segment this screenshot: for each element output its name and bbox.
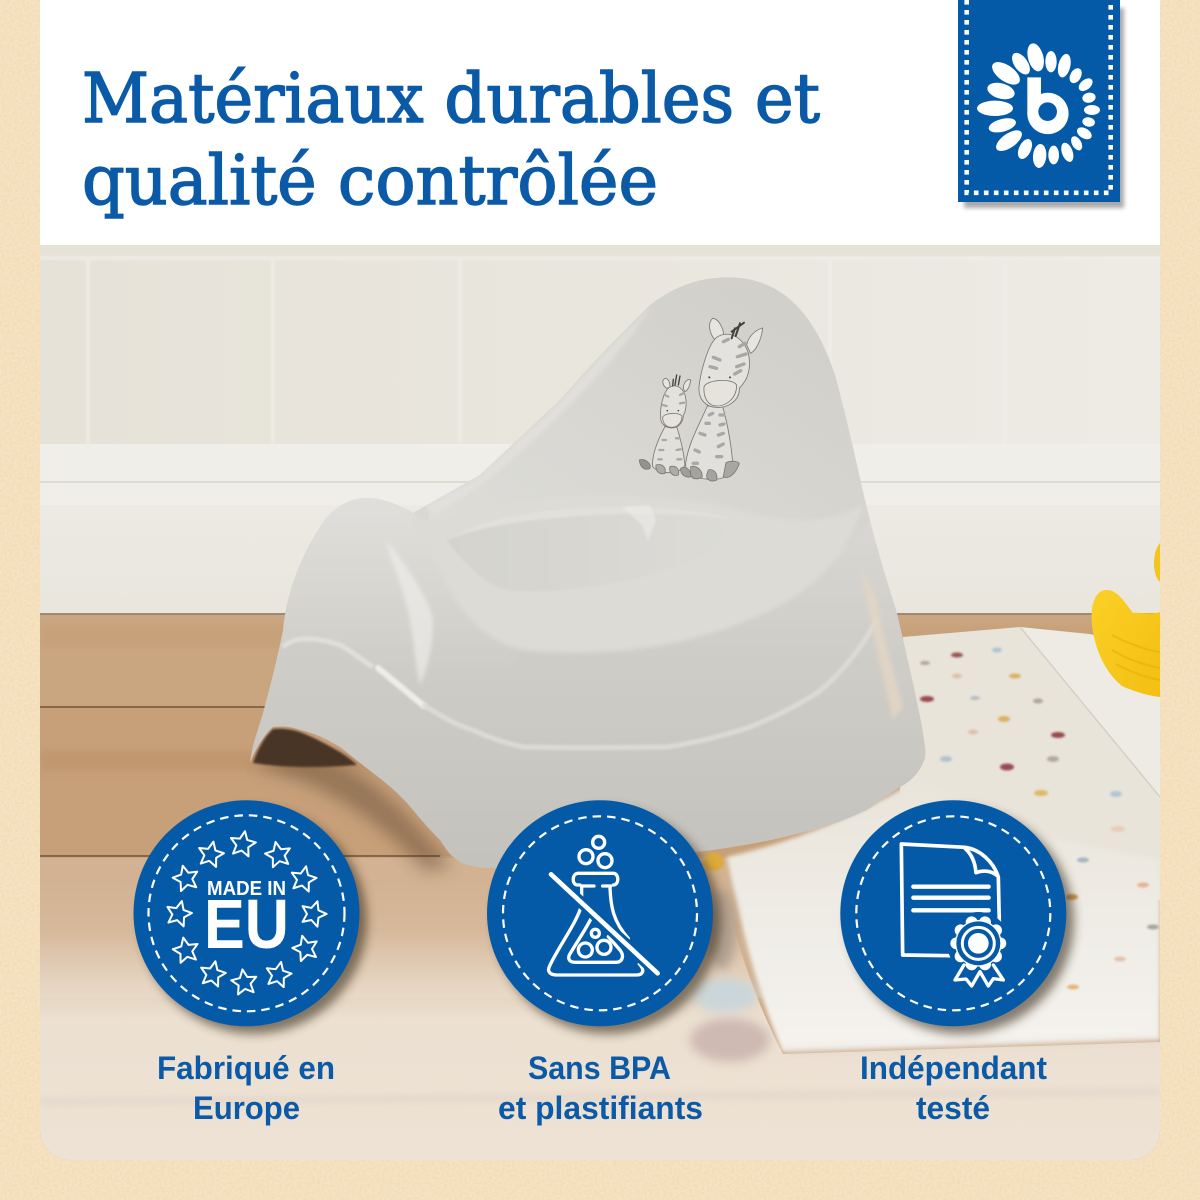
- warm reflection: [864, 580, 902, 718]
- caption: Fabriqué en Europe: Europe: [193, 1090, 300, 1126]
- bottom fade overlay: [40, 926, 1160, 1160]
- wooden floor: [40, 615, 1160, 1160]
- caption: Fabriqué en Europe: [157, 1050, 335, 1126]
- blurred toy: [690, 853, 770, 1062]
- bump: [283, 498, 523, 730]
- brand logo tag: [958, 0, 1124, 208]
- badge: independently tested: [840, 800, 1074, 1034]
- caption: Indépendant testé: testé: [916, 1090, 990, 1126]
- gloss streak on bump: [390, 548, 434, 682]
- icon: crossed-out flask: [549, 836, 658, 975]
- dashed ring: [503, 816, 697, 1010]
- potty shadow: [255, 757, 452, 872]
- seat opening back wall: [447, 507, 735, 540]
- rubber duck: [1092, 543, 1160, 697]
- badge shadow: [848, 808, 1074, 1034]
- title: Matériaux durables et: [82, 60, 820, 139]
- floor line near bottom: [40, 1092, 1160, 1102]
- badge disc: [487, 800, 713, 1026]
- potty silhouette: [250, 505, 926, 868]
- big zebra: [686, 318, 763, 481]
- towel far dots: [1066, 858, 1159, 990]
- ridge line: [423, 620, 877, 748]
- dashed ring: [856, 816, 1050, 1010]
- backrest highlight: [524, 321, 638, 442]
- patterned rug: [900, 627, 1160, 900]
- caption: Indépendant testé: Indépendant: [860, 1050, 1047, 1086]
- white towel: [727, 775, 1160, 1052]
- badge shadow: [494, 808, 720, 1034]
- caption: Indépendant testé: [860, 1050, 1047, 1126]
- zebra decal: [639, 318, 763, 481]
- lip gloss: [378, 668, 424, 706]
- dashed ring: [148, 815, 344, 1011]
- badge shadow: [141, 808, 367, 1034]
- caption: Sans BPA et plastifiants: [498, 1050, 703, 1126]
- wall tiles: [40, 245, 1160, 450]
- title: qualité contrôlée: [82, 142, 658, 221]
- dark foot arch: [253, 729, 357, 767]
- badge: made in EU: [134, 800, 367, 1034]
- icon: certificate: [901, 844, 1010, 986]
- badge: BPA free: [487, 800, 720, 1034]
- back rest: [650, 278, 866, 504]
- rug dots: [920, 648, 1125, 832]
- seat opening: [447, 514, 732, 591]
- caption: Fabriqué en Europe: Fabriqué en: [157, 1050, 335, 1086]
- caption: Sans BPA et plastifiants: Sans BPA: [528, 1050, 671, 1086]
- EU text: EU: [204, 885, 289, 963]
- product photo panel: [40, 245, 1160, 1160]
- caption: Sans BPA et plastifiants: et plastifiants: [498, 1090, 703, 1126]
- gloss on seat: [628, 506, 655, 538]
- potty: [250, 277, 925, 868]
- ring of stars: [164, 829, 329, 995]
- small zebra: [639, 375, 691, 477]
- seat rim: [444, 568, 814, 652]
- badge disc: [134, 800, 360, 1026]
- white header panel: [40, 0, 1160, 245]
- badge disc: [840, 800, 1066, 1026]
- lip left gloss: [283, 639, 373, 667]
- baseboard: [40, 444, 1160, 616]
- rug lower edge: [783, 1040, 1160, 1052]
- title: [82, 60, 820, 221]
- made in text: MADE IN: [207, 878, 286, 900]
